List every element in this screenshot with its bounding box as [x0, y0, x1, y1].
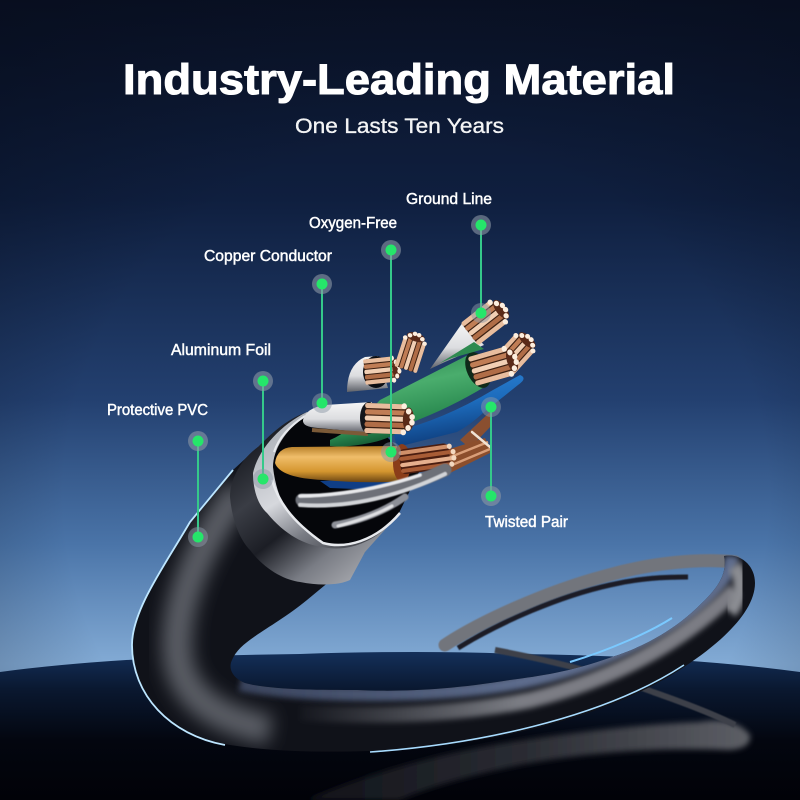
callout: Aluminum Foil: Aluminum Foil	[171, 342, 271, 359]
orange wire copper bundle	[398, 442, 458, 475]
callout: Twisted Pair	[481, 397, 568, 531]
small white wire	[347, 356, 388, 392]
subtitle: One Lasts Ten Years	[295, 115, 504, 138]
front white wire	[303, 402, 378, 434]
callout: Aluminum Foil	[171, 342, 273, 489]
thin cable strand behind	[445, 561, 735, 725]
floor reflection of cable	[306, 721, 750, 800]
callout: Oxygen-Free	[309, 215, 401, 462]
front white wire copper bundle	[365, 402, 415, 436]
ground wire copper bundle	[460, 294, 515, 346]
metal sleeve	[230, 412, 400, 584]
small wire copper bundle	[363, 355, 403, 386]
sleeve silver band	[253, 412, 400, 548]
blue rim light bottom right	[370, 618, 684, 752]
silver foil strands	[300, 470, 445, 526]
callout: Oxygen-Free: Oxygen-Free	[309, 215, 397, 232]
green wire copper bundle	[468, 343, 522, 387]
blue stripe under orange wire	[320, 478, 400, 490]
blue wire	[393, 375, 524, 447]
callout: Copper Conductor	[204, 248, 332, 413]
green wire	[330, 354, 486, 447]
blue rim light left	[132, 470, 233, 745]
upper right copper bundle	[491, 327, 541, 378]
callout: Protective PVC: Protective PVC	[107, 402, 208, 419]
main cable body	[132, 447, 755, 752]
cable opening	[272, 410, 420, 545]
callout: Copper Conductor: Copper Conductor	[204, 248, 332, 265]
reflective floor	[0, 652, 800, 800]
callout: Ground Line	[406, 191, 492, 323]
ground wire	[430, 322, 484, 369]
callout: Twisted Pair: Twisted Pair	[485, 514, 568, 531]
rear twisted copper	[440, 412, 492, 473]
orange wire	[275, 444, 411, 482]
rear copper bundle	[394, 329, 429, 373]
title: Industry-Leading Material	[123, 56, 675, 104]
callout: Ground Line: Ground Line	[406, 191, 492, 208]
callout: Protective PVC	[107, 402, 208, 547]
